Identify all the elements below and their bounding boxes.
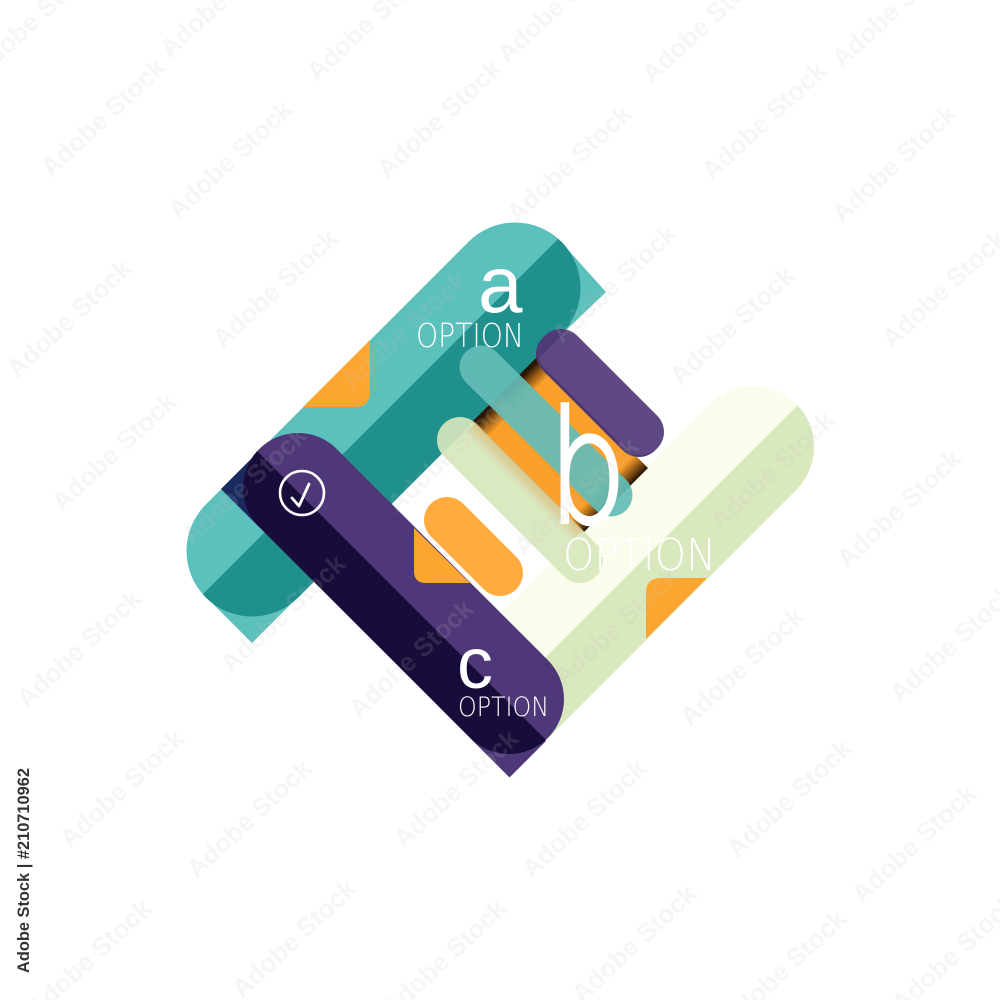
panel: option a teal bar bbox=[206, 242, 606, 643]
watermark: repeated Adobe Stock marks: Adobe Stock bbox=[226, 873, 363, 1000]
watermark: repeated Adobe Stock marks: Adobe Stock bbox=[54, 723, 191, 854]
watermark: repeated Adobe Stock marks: Adobe Stock bbox=[343, 593, 480, 724]
watermark: repeated Adobe Stock marks: Adobe Stock bbox=[371, 53, 508, 184]
label: option b bbox=[548, 380, 716, 581]
watermark: repeated Adobe Stock marks: Adobe Stock bbox=[162, 94, 299, 225]
label: option c: c bbox=[457, 624, 493, 704]
watermark: repeated Adobe Stock marks: Adobe Stock bbox=[831, 443, 968, 574]
shading: tan edge on green pill bbox=[464, 422, 583, 542]
pill: translucent teal bbox=[481, 367, 611, 495]
icon: orange corner on purple bar bbox=[414, 528, 470, 583]
watermark: repeated Adobe Stock marks: Adobe Stock bbox=[381, 388, 518, 519]
credit: vertical stock id: Adobe Stock | #210710962 bbox=[14, 768, 33, 973]
watermark: repeated Adobe Stock marks: Adobe Stock bbox=[664, 260, 801, 391]
label: option c: OPTION bbox=[458, 692, 549, 723]
watermark: repeated Adobe Stock marks: Adobe Stock bbox=[846, 778, 983, 909]
watermark: repeated Adobe Stock marks: Adobe Stock bbox=[548, 561, 685, 692]
label: option a: OPTION bbox=[416, 316, 524, 355]
icon: orange corner on teal bar bbox=[303, 340, 370, 407]
diagram: option a, b, c bars bbox=[206, 240, 814, 778]
watermark: repeated Adobe Stock marks: Adobe Stock bbox=[207, 223, 344, 354]
watermark: repeated Adobe Stock marks: Adobe Stock bbox=[721, 733, 858, 864]
watermark: repeated Adobe Stock marks: Adobe Stock bbox=[215, 548, 352, 679]
icon: check mark in circle bbox=[280, 471, 324, 515]
panel: orange slit between bars bbox=[472, 357, 648, 533]
watermark: repeated Adobe Stock marks: Adobe Stock bbox=[674, 601, 811, 732]
watermark: repeated Adobe Stock marks: Adobe Stock bbox=[546, 218, 683, 349]
label: option b: OPTION bbox=[563, 530, 716, 581]
pill: translucent green bbox=[460, 440, 580, 560]
panel: option b pale green bar bbox=[500, 386, 814, 700]
pill: small purple bbox=[559, 352, 641, 434]
panel: option c purple bar bbox=[221, 452, 546, 778]
watermark: repeated Adobe Stock marks: Adobe Stock bbox=[516, 753, 653, 884]
watermark: repeated Adobe Stock marks: Adobe Stock bbox=[696, 55, 833, 186]
icon: orange corner on pale bar bbox=[646, 578, 707, 639]
label: option c bbox=[457, 624, 549, 723]
watermark: repeated Adobe Stock marks: Adobe Stock bbox=[35, 52, 172, 183]
label: option a bbox=[416, 240, 524, 355]
watermark: repeated Adobe Stock marks: Adobe Stock bbox=[1, 253, 138, 384]
watermark: repeated Adobe Stock marks: Adobe Stock bbox=[181, 753, 318, 884]
watermark: repeated Adobe Stock marks: Adobe Stock bbox=[11, 583, 148, 714]
label: option a: a bbox=[478, 240, 523, 329]
watermark: repeated Adobe Stock marks: Adobe Stock bbox=[501, 98, 638, 229]
pill: orange bbox=[447, 520, 500, 573]
watermark: repeated Adobe Stock marks: Adobe Stock bbox=[46, 386, 183, 517]
watermark: repeated Adobe Stock marks: Adobe Stock bbox=[508, 431, 645, 562]
label: option b: b bbox=[548, 380, 627, 560]
watermark: repeated Adobe Stock marks: Adobe Stock bbox=[388, 723, 525, 854]
watermark: repeated Adobe Stock marks: Adobe Stock bbox=[826, 98, 963, 229]
watermark: repeated Adobe Stock marks: Adobe Stock bbox=[336, 265, 473, 396]
watermark: repeated Adobe Stock marks: Adobe Stock bbox=[176, 420, 313, 551]
watermark: repeated Adobe Stock marks: Adobe Stock bbox=[704, 405, 841, 536]
